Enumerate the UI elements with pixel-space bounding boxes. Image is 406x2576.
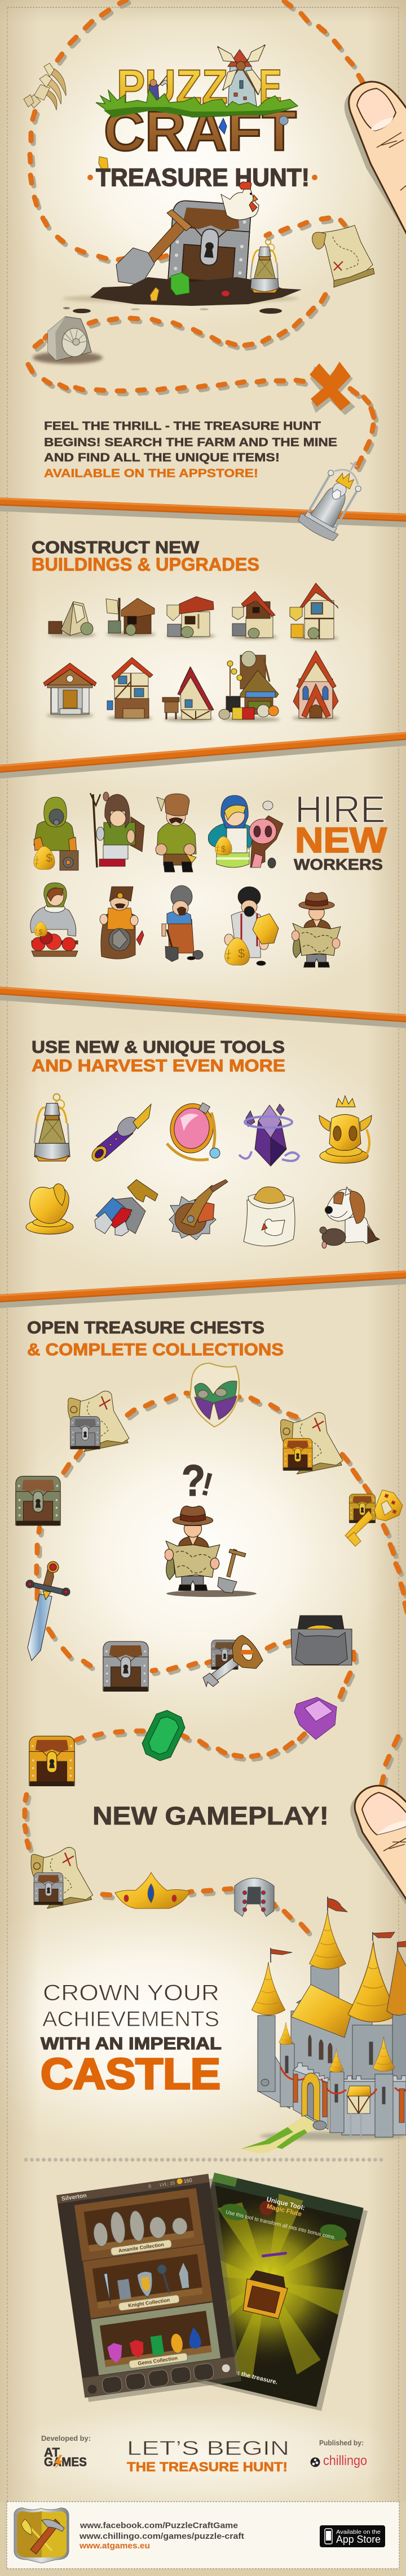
building: tent — [48, 602, 96, 637]
heading: use new tools — [32, 1037, 285, 1075]
back towers — [311, 1966, 339, 2000]
gatehouse — [347, 2095, 370, 2114]
icon: orange X mark — [310, 362, 355, 415]
heading: construct new buildings — [32, 537, 259, 575]
icon: gold chest and gold key — [345, 1490, 403, 1546]
text: developed by: Developed by: — [41, 2434, 91, 2442]
text: status bar: LVL: 15 — [160, 2181, 175, 2187]
shelf: knight collection — [83, 2244, 213, 2319]
panel: tools — [26, 1094, 379, 1248]
gate — [302, 2073, 320, 2121]
tool: golden apple — [26, 1184, 73, 1234]
castle shadow — [259, 2132, 406, 2141]
chicken — [221, 181, 259, 220]
icon: silver bracelet — [235, 1878, 274, 1916]
tool: purple crystal — [239, 1104, 299, 1166]
left small tower — [280, 2044, 294, 2107]
worker: rat hat — [90, 792, 144, 867]
dirt specks — [63, 307, 282, 314]
worker: explorer — [292, 892, 341, 967]
panel: footer links — [0, 2502, 406, 2576]
tool: feed sack — [244, 1187, 295, 1246]
screenshot: unique tool: Magic Flute — [266, 2203, 302, 2218]
worker: hazmat: $ — [46, 852, 52, 865]
building: market — [219, 651, 280, 722]
text: urls: www.chillingo.com/games/puzzle-craft — [79, 2532, 244, 2541]
tool: golden cow — [319, 1096, 372, 1163]
chest in rays — [242, 2270, 288, 2319]
text: published by: Published by: — [319, 2439, 364, 2447]
big gold roof — [291, 1985, 354, 2037]
panel: workers row two — [30, 883, 341, 967]
building: church — [292, 651, 339, 720]
shelf: gems collection — [91, 2302, 220, 2375]
right great tower — [352, 2025, 395, 2095]
tool: pink mirror — [167, 1101, 220, 1160]
tool: saw — [169, 1180, 228, 1240]
heading: crown your achievements: CROWN YOUR — [43, 1981, 219, 2005]
hero: chest, chicken, shovel, lantern and dirt — [62, 181, 302, 314]
screenshot: collections shelves — [56, 2174, 241, 2402]
text: tool description: Use this tool to transform all rats into bonus coins. — [225, 2209, 337, 2240]
text block: intro: AND FIND ALL THE UNIQUE ITEMS! — [44, 451, 280, 464]
heading: let's begin: LET’S BEGIN — [127, 2437, 289, 2459]
worker: apple farmer: $ — [38, 928, 43, 936]
icon: map and gold chest right — [281, 1412, 343, 1474]
icon: sword — [26, 1561, 70, 1661]
grass path — [241, 2110, 325, 2153]
dashed treasure trails — [25, 0, 406, 1934]
reaper — [148, 75, 167, 100]
logo: AT Games — [44, 2445, 87, 2469]
icon: finger bottom — [350, 1786, 406, 1910]
green gem — [171, 273, 189, 295]
divider 3 — [0, 987, 406, 1025]
icon: silver key and chest — [203, 1635, 263, 1687]
icon: title dot right — [312, 175, 317, 180]
gold key — [345, 1490, 403, 1546]
divider 2 — [0, 733, 406, 776]
text: urls: www.facebook.com/PuzzleCraftGame — [80, 2521, 238, 2530]
icon: gold jewelled chest — [29, 1736, 74, 1786]
heading: open treasure chests: & COMPLETE COLLECTIONS — [27, 1340, 284, 1359]
building: workshop — [166, 597, 215, 638]
text: status bar: 0 — [148, 2183, 152, 2189]
text: status bar: 160 — [183, 2177, 192, 2184]
building: aframe house — [162, 667, 214, 722]
heading: let's begin — [127, 2437, 289, 2474]
icon: purple gem — [294, 1697, 337, 1739]
far right tower — [392, 2008, 406, 2081]
icon: app icon shield — [14, 2508, 69, 2563]
heading: hire new workers: WORKERS — [294, 856, 383, 873]
icon: wooden chest — [16, 1476, 60, 1525]
icon: emerald — [139, 1707, 188, 1764]
text block: intro: AVAILABLE ON THE APPSTORE! — [44, 467, 258, 480]
worker: gold miner: $ — [238, 946, 245, 960]
badge: app store: Available on the — [336, 2529, 381, 2535]
text: town name: Silverton — [61, 2192, 87, 2203]
icon: silver queen statue — [296, 451, 374, 543]
text: unique tool title: Unique Tool: — [266, 2196, 306, 2212]
badge: app store: App Store — [336, 2534, 381, 2545]
windmill tower — [218, 45, 265, 110]
logo: AT Games: GAMES — [44, 2455, 87, 2469]
panel: workers row one — [34, 792, 283, 872]
panel: buildings — [43, 583, 339, 722]
text block: intro: FEEL THE THRILL - THE TREASURE HUNT — [44, 420, 321, 433]
heading: let's begin: THE TREASURE HUNT! — [127, 2459, 288, 2474]
worker: blacksmith with shovel — [162, 886, 203, 962]
screenshot: unique tool — [196, 2173, 368, 2411]
text: collect the treasure: Collect the treasure. — [219, 2366, 279, 2386]
front walls — [293, 2070, 328, 2129]
tool: lantern — [34, 1094, 70, 1161]
worker: hazmat — [34, 797, 78, 870]
text block: intro — [44, 420, 337, 480]
building: temple — [43, 663, 96, 718]
icon: title dot left — [87, 175, 93, 180]
icon: ammonite stone — [33, 317, 103, 364]
heading: crown your achievements — [41, 1981, 222, 2098]
shovel — [116, 210, 192, 285]
shelf: gems collection: Gems Collection — [138, 2355, 178, 2366]
shelf: amanite collection: Amanite Collection — [118, 2241, 164, 2254]
building: timber shop — [232, 591, 277, 639]
heading: use new tools: USE NEW & UNIQUE TOOLS — [32, 1037, 285, 1057]
tool: dog and rat — [320, 1187, 379, 1248]
icon: map and silver chest bottom — [31, 1847, 93, 1908]
icon: map and silver chest left — [68, 1391, 129, 1452]
icon: venetian mask — [190, 1363, 239, 1427]
grass band — [96, 89, 298, 117]
shelf: amanite collection — [74, 2188, 204, 2261]
heading: crown your achievements: CASTLE — [41, 2050, 220, 2098]
heading: open treasure chests — [27, 1318, 284, 1359]
heading: crown your achievements: ACHIEVEMENTS — [42, 2008, 219, 2031]
building: timber house — [290, 583, 338, 640]
text: status bar — [148, 2177, 192, 2189]
rocks — [313, 2121, 326, 2130]
text: urls: www.atgames.eu — [79, 2542, 150, 2551]
heading: open treasure chests: OPEN TREASURE CHESTS — [27, 1318, 264, 1337]
red mushroom gem — [222, 291, 230, 296]
heading: use new tools: AND HARVEST EVEN MORE — [32, 1056, 285, 1075]
building: hut — [106, 598, 156, 637]
heading: hire new workers: NEW — [295, 821, 387, 860]
worker: gold miner — [224, 887, 279, 966]
icon: fossil ribs — [24, 63, 66, 110]
text block: intro: BEGINS! SEARCH THE FARM AND THE MINE — [44, 436, 337, 449]
dirt pile — [90, 277, 302, 306]
illustration: imperial castle — [241, 1897, 406, 2153]
badge: app store — [320, 2525, 385, 2547]
icon: flute — [262, 2252, 287, 2258]
hay letters: PUZZ — [117, 60, 228, 114]
front towers — [330, 2072, 344, 2133]
icon: tiara — [115, 1872, 190, 1908]
logo: chillingo: chillingo — [323, 2453, 367, 2468]
heading: construct new buildings: CONSTRUCT NEW — [32, 537, 200, 557]
worker: milkmaid and cow: $ — [221, 844, 226, 854]
left wall and tower — [258, 2028, 290, 2108]
wood letters: CRAFT — [104, 100, 297, 163]
amber nugget — [150, 287, 159, 301]
icon: silver chest bottom — [103, 1641, 148, 1692]
tool: magic flute — [89, 1104, 151, 1164]
worker: bucket hat — [156, 794, 196, 872]
icon: open silver chest with coins — [291, 1616, 352, 1665]
heading: hire new workers: HIRE — [295, 788, 386, 831]
heading: hire new workers — [294, 788, 387, 873]
text: urls — [79, 2521, 244, 2551]
chest — [167, 200, 251, 291]
toolbar — [82, 2357, 237, 2397]
logo: AT Games: AT — [44, 2445, 60, 2459]
heading: construct new buildings: BUILDINGS & UPGRADES — [32, 554, 259, 575]
worker: milkmaid and cow — [208, 795, 283, 868]
heading: new gameplay: NEW GAMEPLAY! — [92, 1801, 329, 1830]
divider 4 — [0, 1271, 406, 1305]
dotted divider — [26, 2157, 387, 2162]
title: TREASURE HUNT: TREASURE HUNT! — [96, 164, 310, 192]
icon: finger top — [345, 82, 406, 239]
icon: treasure map — [312, 225, 374, 287]
lantern — [250, 239, 279, 293]
building: half-timber house — [107, 657, 153, 720]
garlands and banners — [280, 2066, 406, 2095]
heading: crown your achievements: WITH AN IMPERIAL — [41, 2034, 222, 2053]
ore nuggets — [99, 116, 288, 171]
shelf: knight collection: Knight Collection — [128, 2297, 170, 2308]
worker: apple farmer — [30, 883, 78, 956]
worker: miner with sack — [100, 887, 144, 959]
logo: Puzzle Craft — [96, 45, 298, 171]
icon: question and exclamation marks: ? — [182, 1456, 205, 1505]
logo: Puzzle Craft: E — [259, 60, 282, 114]
tool: magnet — [95, 1180, 158, 1236]
icon: question and exclamation marks: ! — [197, 1465, 217, 1503]
divider 1 — [0, 499, 406, 524]
shovel — [218, 1549, 246, 1593]
character: explorer with map and shovel — [165, 1506, 257, 1597]
keep — [291, 2011, 372, 2081]
